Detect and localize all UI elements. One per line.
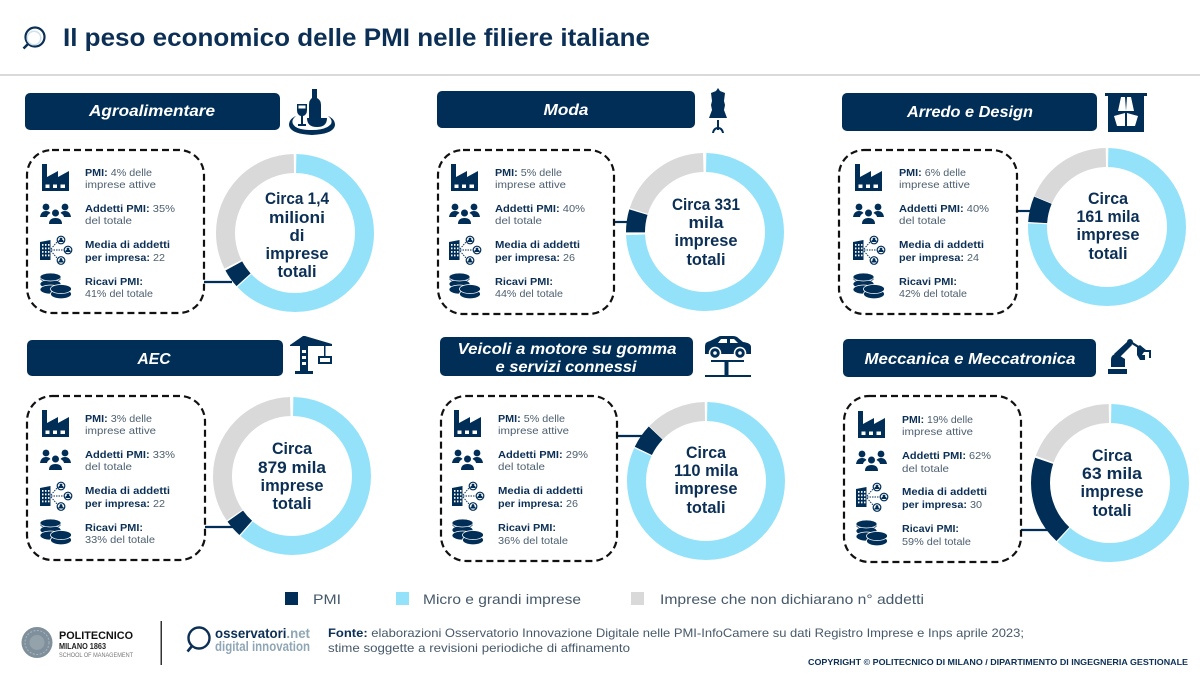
stats text: Media di addetti <box>85 485 170 497</box>
header: Meccanica e Meccatronica <box>843 339 1096 377</box>
stats text: Addetti PMI: 29% <box>498 449 588 461</box>
header: Agroalimentare: Agroalimentare <box>88 103 215 120</box>
stats text: per impresa: 24 <box>899 252 979 264</box>
stats text: Ricavi PMI: <box>902 523 959 535</box>
stats text: imprese attive <box>498 425 569 437</box>
donut label: Circa <box>1092 447 1133 465</box>
donut label: imprese <box>266 245 328 263</box>
donut label: totali <box>272 495 312 513</box>
stats text: PMI: 4% delle <box>85 167 152 179</box>
stats text <box>498 413 588 547</box>
panel: Veicoli <box>440 336 776 561</box>
donut label <box>258 440 327 513</box>
donut label: imprese <box>674 480 738 498</box>
stats text: Ricavi PMI: <box>495 276 553 288</box>
stats text: Addetti PMI: 40% <box>495 203 585 215</box>
dashed stats box <box>27 396 205 560</box>
stats text: 41% del totale <box>85 288 153 300</box>
stats text: del totale <box>495 215 542 227</box>
header: AEC: AEC <box>136 351 171 368</box>
title: Il peso economico delle PMI nelle filiere italiane <box>63 24 650 52</box>
stats text: per impresa: 30 <box>902 499 982 511</box>
header: Meccanica e Meccatronica: Meccanica e Meccatronica <box>864 351 1076 368</box>
stats text: PMI: 5% delle <box>495 167 562 179</box>
donut label: 63 mila <box>1082 465 1143 483</box>
donut label: imprese <box>1076 226 1140 244</box>
stats text: 44% del totale <box>495 288 563 300</box>
donut label: totali <box>686 251 726 269</box>
donut label: totali <box>1088 245 1128 263</box>
donut chart <box>636 412 776 550</box>
icon: magnifier logo <box>24 28 44 48</box>
stats text: PMI: 5% delle <box>498 413 565 425</box>
icons <box>856 411 888 546</box>
copyright: COPYRIGHT © POLITECNICO DI MILANO / DIPARTIMENTO DI INGEGNERIA GESTIONALE <box>808 657 1188 667</box>
icons <box>452 410 484 545</box>
stats text: Ricavi PMI: <box>85 522 143 534</box>
donut label: imprese <box>1080 483 1144 501</box>
stats text: Ricavi PMI: <box>899 276 957 288</box>
logo: Politecnico di Milano: POLITECNICO <box>59 630 133 642</box>
logo: Politecnico di Milano: SCHOOL OF MANAGEMENT <box>59 653 133 659</box>
stats text: Media di addetti <box>899 239 984 251</box>
donut label <box>674 444 739 517</box>
stats text: 59% del totale <box>902 536 971 548</box>
header: Agroalimentare <box>25 93 280 130</box>
legend: PMI <box>313 591 341 607</box>
dashed stats box <box>844 396 1021 562</box>
stats text: PMI: 6% delle <box>899 167 966 179</box>
panel: Moda <box>437 88 774 314</box>
icons <box>853 164 885 299</box>
stats text: Addetti PMI: 40% <box>899 203 989 215</box>
header: AEC <box>27 340 283 376</box>
logo: osservatori.net <box>188 626 310 654</box>
stats text: del totale <box>85 215 132 227</box>
stats text: Media di addetti <box>495 239 580 251</box>
legend: Micro e grandi imprese <box>423 591 581 607</box>
header: Veicoli: e servizi connessi <box>496 359 637 376</box>
panel: Arredo e Design <box>839 93 1176 314</box>
stats text: PMI: 19% delle <box>902 414 973 426</box>
donut label <box>672 196 740 269</box>
donut label: mila <box>688 214 724 232</box>
donut label: Circa <box>1088 190 1129 208</box>
stats text: imprese attive <box>899 179 970 191</box>
stats text: del totale <box>899 215 946 227</box>
legend: Imprese che non dichiarano n° addetti <box>660 591 924 607</box>
stats text: del totale <box>902 463 949 475</box>
stats text: Addetti PMI: 33% <box>85 449 175 461</box>
donut label: totali <box>686 499 726 517</box>
source note <box>328 626 1024 655</box>
stats text <box>902 414 991 548</box>
donut chart <box>222 406 362 546</box>
header: Veicoli <box>440 337 693 376</box>
panel: Meccanica e Meccatronica <box>843 339 1180 562</box>
icon: car on lift <box>705 336 751 377</box>
donut label: imprese <box>674 232 738 250</box>
dashed stats box <box>438 150 614 314</box>
header: Veicoli: Veicoli a motore su gomma <box>458 341 677 358</box>
donut chart <box>1040 414 1180 552</box>
donut chart <box>636 162 774 302</box>
stats text: 33% del totale <box>85 534 155 546</box>
dashed stats box <box>441 396 617 561</box>
connector <box>205 526 237 528</box>
donut label: Circa <box>686 444 727 462</box>
icon: dress mannequin <box>709 88 727 133</box>
connector <box>1017 210 1032 212</box>
stats text: per impresa: 26 <box>495 252 575 264</box>
stats text: per impresa: 26 <box>498 498 578 510</box>
icons <box>449 164 481 299</box>
donut label: totali <box>1092 502 1132 520</box>
connector <box>204 281 232 283</box>
stats text: imprese attive <box>85 425 156 437</box>
icon: window with curtains <box>1105 93 1147 132</box>
donut label: Circa 1,4 <box>265 190 330 208</box>
donut label: 879 mila <box>258 459 327 477</box>
stats text: PMI: 3% delle <box>85 413 152 425</box>
logo: Politecnico di Milano: MILANO 1863 <box>59 642 106 651</box>
stats text: del totale <box>498 461 545 473</box>
header: Arredo e Design <box>842 93 1097 131</box>
stats text <box>85 167 175 300</box>
donut label: Circa 331 <box>672 196 740 214</box>
header: Moda <box>437 91 695 128</box>
dashed stats box <box>839 150 1017 314</box>
stats text: Addetti PMI: 62% <box>902 450 991 462</box>
stats text: 42% del totale <box>899 288 967 300</box>
stats text: per impresa: 22 <box>85 498 165 510</box>
donut label: milioni <box>269 209 325 227</box>
donut label: imprese <box>260 477 324 495</box>
header: Arredo e Design: Arredo e Design <box>906 104 1033 121</box>
stats text: imprese attive <box>495 179 566 191</box>
icon: robot arm <box>1108 339 1151 374</box>
stats text: imprese attive <box>902 426 973 438</box>
donut chart <box>226 164 364 302</box>
panel: AEC <box>27 336 362 560</box>
connector <box>1021 529 1051 531</box>
stats text: Media di addetti <box>85 239 170 251</box>
donut chart <box>1038 158 1176 296</box>
stats text <box>899 167 989 300</box>
connector <box>617 435 643 437</box>
stats text: Media di addetti <box>902 486 987 498</box>
logo: Politecnico di Milano <box>22 627 133 659</box>
legend <box>285 591 924 607</box>
connector <box>614 221 630 223</box>
panel: Agroalimentare <box>25 89 364 313</box>
stats text: Addetti PMI: 35% <box>85 203 175 215</box>
icon: wine and food tray <box>289 89 335 135</box>
logo: osservatori.net: osservatori.net <box>215 626 310 641</box>
donut label: 110 mila <box>674 462 739 480</box>
source note: Fonte: elaborazioni Osservatorio Innovazione Digitale nelle PMI-InfoCamere su dati Registro Imprese e Inps aprile 2023; <box>328 626 1024 640</box>
stats text: Ricavi PMI: <box>498 522 556 534</box>
source note: stime soggette a revisioni periodiche di affinamento <box>328 641 630 655</box>
stats text <box>85 413 175 546</box>
donut label: 161 mila <box>1076 208 1140 226</box>
logo: osservatori.net: digital innovation <box>215 639 310 654</box>
dashed stats box <box>27 150 204 313</box>
stats text: Ricavi PMI: <box>85 276 143 288</box>
stats text: del totale <box>85 461 132 473</box>
donut label: totali <box>278 263 316 281</box>
stats text: 36% del totale <box>498 535 568 547</box>
stats text: per impresa: 22 <box>85 252 165 264</box>
donut label <box>1076 190 1140 263</box>
donut label <box>1080 447 1144 520</box>
stats text: Media di addetti <box>498 485 583 497</box>
donut label: di <box>290 227 304 245</box>
donut label: Circa <box>272 440 313 458</box>
icons <box>40 164 72 299</box>
header: Moda: Moda <box>544 102 589 119</box>
stats text: imprese attive <box>85 179 156 191</box>
donut label <box>265 190 330 281</box>
icons <box>40 410 72 545</box>
stats text <box>495 167 585 300</box>
icon: construction crane <box>290 336 332 374</box>
